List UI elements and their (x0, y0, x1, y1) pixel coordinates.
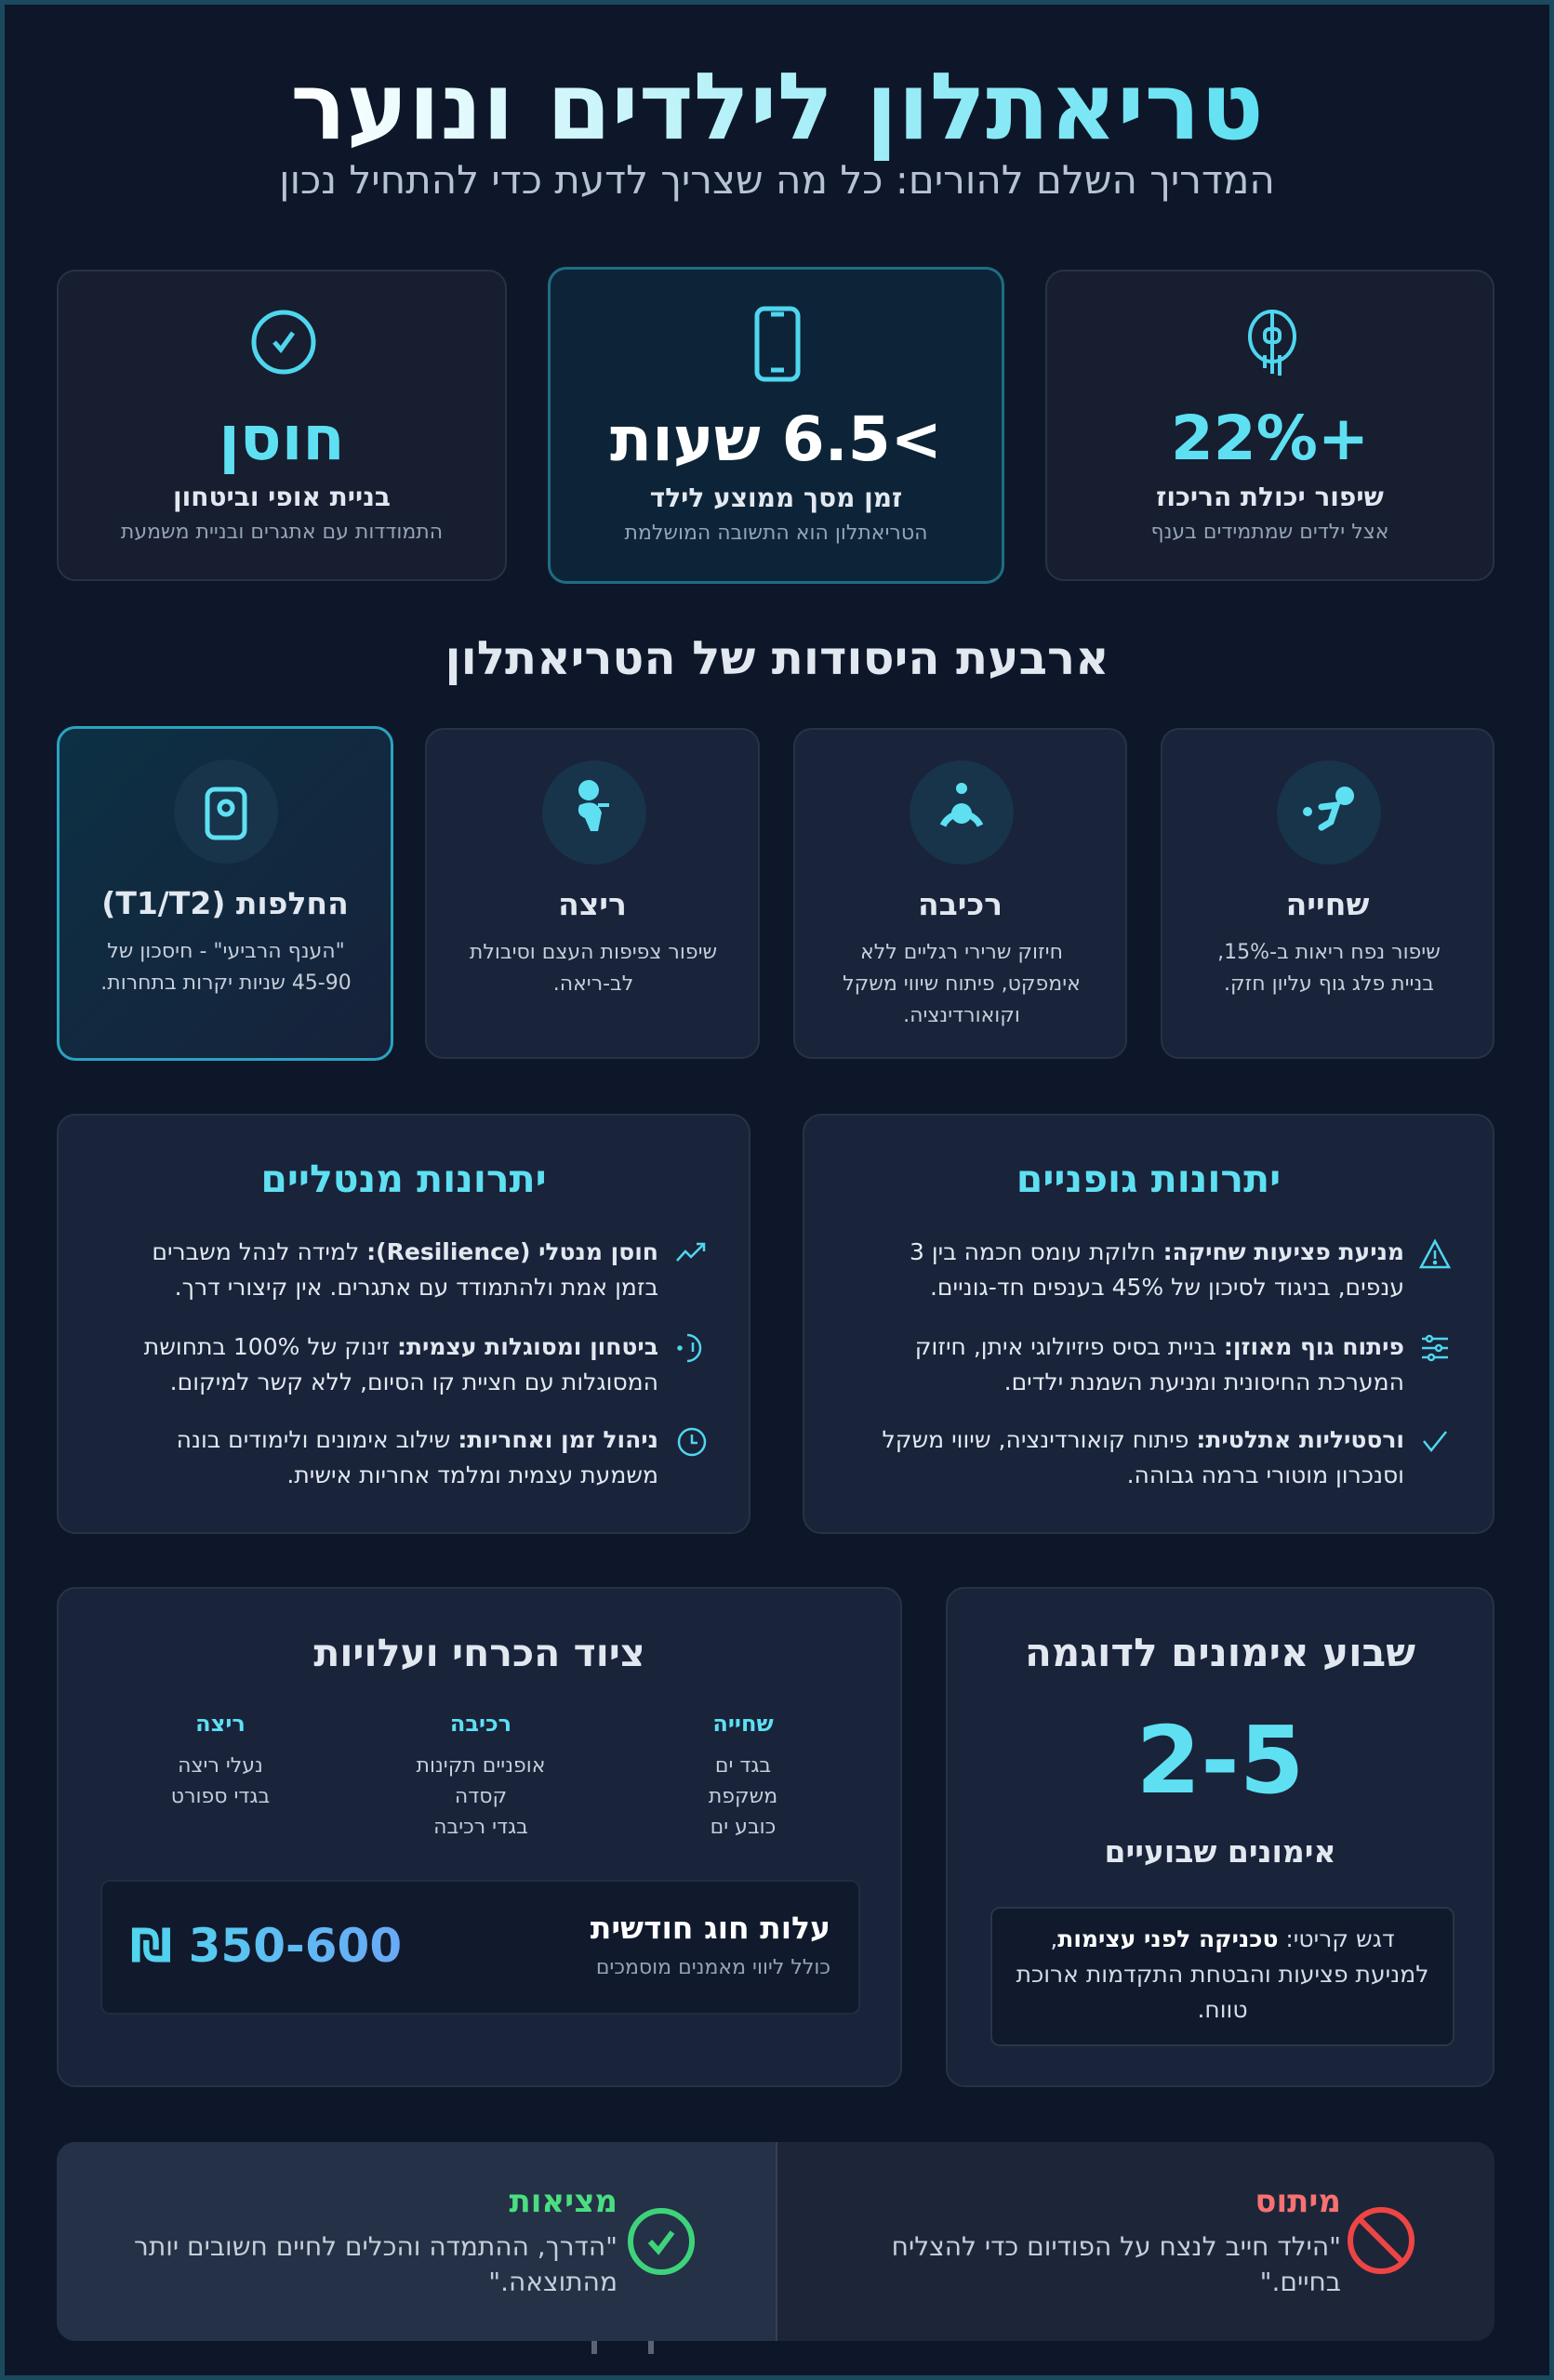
stat desc: התמודדות עם אתגרים ובניית משמעת (121, 521, 443, 544)
text: ורסטיליות אתלטית: פיתוח קואורדינציה, שיווי משקל וסנכרון מוטורי ברמה גבוהה. (882, 1426, 1404, 1488)
stat desc: אצל ילדים שמתמידים בענף (1151, 521, 1388, 544)
icon: trend (676, 1242, 705, 1262)
description: שיפור צפיפות העצם וסיבולת לב-ריאה. (470, 941, 717, 996)
title: ריצה (558, 886, 627, 922)
text: מניעת פציעות שחיקה: חלוקת עומס חכמה בין 3 ענפים, בניגוד לסיכון של 45% בענפים חד-גוניים. (910, 1238, 1404, 1301)
column: cycling: קסדה (455, 1785, 507, 1808)
column: swimming: כובע ים (711, 1816, 776, 1839)
column: running: נעלי ריצה (178, 1754, 263, 1778)
stat label: בניית אופי וביטחון (173, 482, 391, 512)
icon: sliders (1422, 1335, 1448, 1361)
cost box (100, 1880, 860, 2015)
icon: brain (1248, 310, 1296, 376)
callout: דגש קריטי: טכניקה לפני עצימות, למניעת פציעות והבטחת התקדמות ארוכת טווח. (1016, 1925, 1428, 2023)
card: swimming (1161, 728, 1494, 1059)
icon: runner (542, 760, 646, 865)
description: "הענף הרביעי" - חיסכון של 45-90 שניות יקרות בתחרות. (100, 940, 352, 995)
panel: myth vs fact (57, 2142, 1494, 2341)
description: שיפור נפח ריאות ב-15%, בניית פלג גוף עליון חזק. (1217, 941, 1441, 996)
card: cycling (793, 728, 1127, 1059)
heading: יתרונות מנטליים (260, 1157, 547, 1201)
text: פיתוח גוף מאוזן: בניית בסיס פיזיולוגי איתן, חיזוק המערכת החיסונית ומניעת השמנת ילדים. (915, 1333, 1404, 1395)
icon: cyclist (910, 760, 1014, 865)
panel: sample training week (946, 1587, 1494, 2087)
text: ביטחון ומסוגלות עצמית: זינוק של 100% בתחושת המסוגלות עם חציית קו הסיום, ללא קשר למיקום. (144, 1333, 658, 1395)
heading: יתרונות גופניים (1016, 1157, 1281, 1201)
stat label: זמן מסך ממוצע לילד (650, 483, 902, 513)
heading: ציוד הכרחי ועלויות (313, 1631, 645, 1675)
panel: physical benefits (803, 1114, 1494, 1534)
title: שחייה (1286, 886, 1369, 922)
column: cycling: אופניים תקינות (417, 1754, 545, 1778)
cost label: עלות חוג חודשית (591, 1910, 830, 1946)
cost note: כולל ליווי מאמנים מוסמכים (596, 1956, 830, 1979)
title: רכיבה (918, 886, 1003, 922)
icon: phone (755, 307, 800, 381)
card: transitions (57, 726, 393, 1061)
icon: swimmer (1277, 760, 1381, 865)
stat value: שעות‎ 6.5< (610, 403, 942, 475)
title: החלפות (T1/T2) (101, 885, 349, 921)
stat card: resilience (57, 270, 507, 581)
icon: clock (677, 1428, 707, 1456)
stat value: חוסן (219, 403, 345, 474)
icon: check (1423, 1431, 1447, 1452)
stat label: שיפור יכולת הריכוז (1156, 482, 1384, 512)
panel: equipment and costs (57, 1587, 902, 2087)
myth half (892, 2183, 1415, 2297)
column: cycling: בגדי רכיבה (433, 1816, 528, 1839)
column: cycling: רכיבה (450, 1711, 511, 1737)
stat desc: הטריאתלון הוא התשובה המושלמת (625, 522, 928, 545)
title: טריאתלון לילדים ונוער (290, 52, 1264, 161)
fact title: מציאות (510, 2183, 618, 2220)
icon: face (677, 1333, 701, 1363)
panel: mental benefits (57, 1114, 750, 1534)
description: חיזוק שרירי רגליים ללא אימפקט, פיתוח שיווי משקל וקואורדינציה. (843, 941, 1081, 1027)
icon: prohibited (1348, 2207, 1415, 2274)
myth title: מיתוס (1255, 2183, 1341, 2220)
column: running: בגדי ספורט (171, 1785, 270, 1808)
stat card: focus (1045, 270, 1494, 581)
column: running: ריצה (195, 1711, 246, 1737)
subtitle: המדריך השלם להורים: כל מה שצריך לדעת כדי להתחיל נכון (279, 157, 1275, 203)
fact text: "הדרך, ההתמדה והכלים לחיים חשובים יותר מהתוצאה." (134, 2231, 618, 2297)
column: swimming: בגד ים (715, 1754, 771, 1778)
text: חוסן מנטלי (Resilience): למידה לנהל משברים בזמן אמת ולהתמודד עם אתגרים. אין קיצורי דרך. (152, 1238, 658, 1301)
column: swimming (709, 1711, 777, 1839)
heading: שבוע אימונים לדוגמה (1025, 1630, 1415, 1675)
stat card: screen time (548, 267, 1004, 584)
items (882, 1238, 1451, 1488)
myth text: "הילד חייב לנצח על הפודיום כדי להצליח בחיים." (892, 2231, 1341, 2297)
icon: watch (174, 760, 278, 864)
column: swimming: משקפת (709, 1785, 777, 1808)
icon: check circle green (628, 2208, 695, 2275)
callout (990, 1907, 1454, 2046)
column: cycling (417, 1711, 545, 1839)
icon: warning (1419, 1238, 1451, 1268)
big number: 2-5 (1136, 1706, 1304, 1815)
stat value: 22%+ (1171, 403, 1369, 474)
column: running (171, 1711, 270, 1808)
card: running (425, 728, 760, 1059)
icon: check circle (251, 311, 316, 374)
items (144, 1238, 707, 1488)
text: ניהול זמן ואחריות: שילוב אימונים ולימודים בונה משמעת עצמית ומלמד אחריות אישית. (177, 1426, 658, 1488)
fact half (57, 2142, 777, 2341)
section heading: ארבעת היסודות של הטריאתלון (445, 631, 1109, 685)
column: swimming: שחייה (712, 1711, 774, 1737)
sub label: אימונים שבועיים (1105, 1833, 1335, 1870)
price: ₪ 350-600 (130, 1919, 402, 1973)
